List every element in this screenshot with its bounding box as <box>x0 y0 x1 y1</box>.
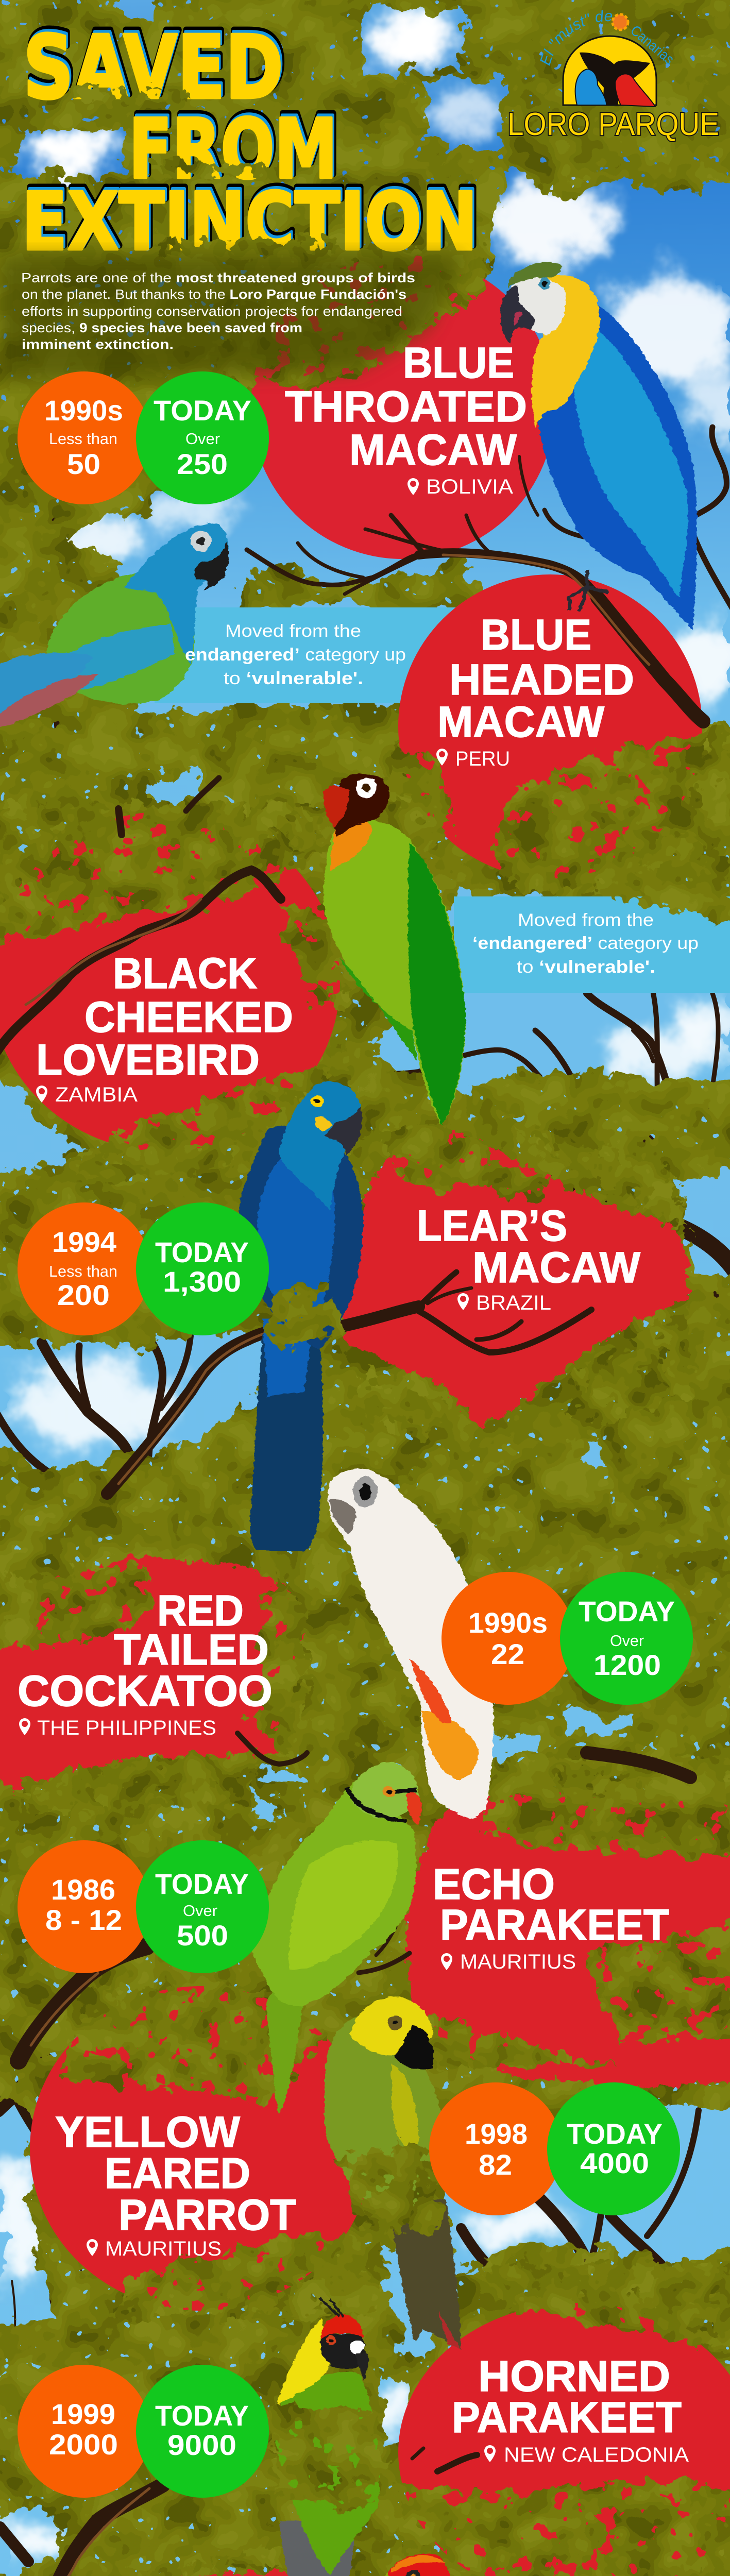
location: MAURITIUS <box>105 2238 222 2260</box>
name: PARAKEET <box>440 1901 669 1949</box>
branch: lower right of cockatoo <box>587 1753 690 1777</box>
stats <box>18 371 269 504</box>
branch: lear's macaw perch <box>107 1272 591 1494</box>
stats: 1994 <box>52 1226 116 1258</box>
red blob: blue throated macaw <box>251 255 555 559</box>
stats: 1990s <box>44 394 123 427</box>
branch: horned parakeet perch <box>0 2448 477 2576</box>
callout text: Moved from the <box>518 910 654 930</box>
logo: Loro Parque <box>507 10 719 142</box>
name: BLUE <box>403 338 514 387</box>
title word: EXTINCTION: EXTINCTION <box>22 175 478 268</box>
callout text: endangered’ category up <box>185 645 406 665</box>
bird: yellow eared parrot <box>325 1996 461 2349</box>
name: BLACK <box>113 949 257 997</box>
stats: 4000 <box>580 2147 649 2179</box>
title word: EXTINCTION: EXTINCTION <box>23 173 479 266</box>
stats: 50 <box>67 448 100 480</box>
stats: TODAY <box>579 1595 675 1628</box>
red blob: echo parakeet <box>405 1793 730 2087</box>
name <box>18 1586 273 1715</box>
bird: black cheeked lovebird <box>323 773 466 1126</box>
foliage: leaves over title <box>62 88 340 255</box>
title word: FROM: FROM <box>130 98 339 195</box>
species: blue headed macaw <box>185 611 634 770</box>
name: CHEEKED <box>84 993 293 1041</box>
red blob: black cheeked lovebird <box>0 811 340 1151</box>
branch: left lower <box>19 1927 410 2061</box>
title word: SAVED: SAVED <box>25 13 285 115</box>
stats: Over <box>610 1632 644 1650</box>
stats: 200 <box>57 1279 110 1311</box>
red blob: red tailed cockatoo <box>0 1555 302 1792</box>
logo arc text: El "must" de <box>540 10 612 66</box>
bird: horned parakeet <box>275 2298 379 2576</box>
name <box>437 611 634 746</box>
callouts: background panels <box>155 607 730 2576</box>
stats: TODAY <box>567 2117 663 2150</box>
title word: EXTINCTION: EXTINCTION <box>24 171 480 264</box>
red blob: red tailed amazon <box>60 2571 349 2576</box>
logo whale tail <box>580 53 650 105</box>
title word: SAVED: SAVED <box>25 14 285 116</box>
name: MACAW <box>437 698 605 746</box>
name: EARED <box>105 2149 250 2197</box>
name <box>433 1860 669 1949</box>
name: YELLOW <box>55 2108 241 2156</box>
stats: 500 <box>177 1919 228 1952</box>
callout text: ‘endangered’ category up <box>472 934 699 953</box>
intro text <box>21 270 415 352</box>
intro text: imminent extinction. <box>22 336 174 352</box>
callout text <box>472 910 699 977</box>
name: TAILED <box>114 1625 269 1674</box>
red blob: yellow eared parrot <box>30 1986 372 2311</box>
title word: FROM: FROM <box>131 97 339 193</box>
name <box>36 949 293 1084</box>
stats: 250 <box>177 448 228 480</box>
callout text: Moved from the <box>225 621 361 641</box>
bird: echo parakeet <box>252 1762 421 2115</box>
callout text: to ‘vulnerable'. <box>224 669 363 688</box>
stats: 1986 <box>51 1873 115 1906</box>
branch: cockatoo perch <box>237 1733 307 1764</box>
logo dolphin <box>575 69 606 105</box>
red blob: horned parakeet <box>398 2303 730 2576</box>
name <box>417 1201 641 1292</box>
intro text: Parrots are one of the most threatened groups of birds <box>21 270 415 285</box>
name: ECHO <box>433 1860 555 1908</box>
name: THROATED <box>285 382 527 431</box>
name <box>452 2352 682 2442</box>
species: red tailed cockatoo <box>18 1572 693 1739</box>
name: COCKATOO <box>18 1667 273 1715</box>
location: BRAZIL <box>476 1292 551 1314</box>
location: ZAMBIA <box>55 1083 138 1106</box>
title word: SAVED: SAVED <box>23 17 283 119</box>
species: blue throated macaw <box>18 338 527 504</box>
location: BOLIVIA <box>426 476 513 498</box>
stats: Less than <box>49 1262 117 1280</box>
stats: 1200 <box>593 1649 661 1681</box>
intro text: efforts in supporting conservation projects for endangered <box>22 303 402 319</box>
bird: red tailed amazon <box>347 2554 463 2576</box>
name: LEAR’S <box>417 1201 567 1250</box>
location: PERU <box>455 748 510 770</box>
stats: 82 <box>479 2148 512 2181</box>
name: RED <box>157 1586 244 1635</box>
stats: 1990s <box>468 1606 548 1639</box>
stats <box>429 2082 680 2215</box>
intro dark backdrop <box>0 255 464 381</box>
intro text: on the planet. But thanks to the Loro Parque Fundación's <box>22 286 406 302</box>
name: HORNED <box>478 2352 670 2400</box>
name: LOVEBIRD <box>36 1036 260 1084</box>
name: MACAW <box>472 1243 641 1292</box>
stats: 1999 <box>51 2398 115 2430</box>
stats: 2000 <box>49 2428 118 2461</box>
foliage: overlay on birds <box>268 1283 464 2576</box>
stats: Over <box>183 1902 217 1920</box>
stats <box>18 2365 269 2498</box>
logo arc text 2: Canarias <box>627 22 677 67</box>
name: HEADED <box>449 655 634 704</box>
stats: 9000 <box>167 2429 236 2461</box>
species: horned parakeet <box>18 2352 689 2498</box>
location: NEW CALEDONIA <box>504 2444 689 2466</box>
logo parrot <box>615 74 655 107</box>
stats: 22 <box>491 1638 524 1670</box>
name <box>285 338 527 474</box>
logo dome <box>563 36 656 105</box>
species: lear's macaw <box>18 1201 641 1335</box>
species: black cheeked lovebird <box>36 910 699 1106</box>
stats: 1998 <box>465 2117 528 2150</box>
species: yellow eared parrot <box>55 2082 680 2260</box>
name: MACAW <box>349 426 517 474</box>
species: echo parakeet <box>18 1840 669 1973</box>
callout text: to ‘vulnerable'. <box>517 957 655 977</box>
callout text <box>185 621 406 688</box>
location: THE PHILIPPINES <box>37 1717 216 1739</box>
stats: Over <box>185 430 220 448</box>
bird: lear's macaw <box>239 1081 363 1551</box>
title word: FROM: FROM <box>129 101 337 197</box>
title <box>22 13 480 268</box>
stats: TODAY <box>154 394 251 427</box>
stats: TODAY <box>155 1868 249 1900</box>
name: BLUE <box>481 611 591 659</box>
stats <box>18 1840 269 1973</box>
red blob: lear's macaw <box>345 1128 689 1427</box>
stats: Less than <box>49 430 117 448</box>
location: MAURITIUS <box>460 1951 576 1973</box>
stats <box>18 1202 269 1335</box>
stats: TODAY <box>155 1236 249 1268</box>
stats: TODAY <box>155 2399 249 2432</box>
stats: 1,300 <box>163 1265 241 1298</box>
red blob: blue headed macaw <box>398 574 702 878</box>
bird: red tailed cockatoo <box>328 1468 494 1818</box>
branch: black cheeked lovebird <box>0 778 281 1051</box>
stats <box>442 1572 693 1705</box>
name <box>55 2108 296 2239</box>
name: PARROT <box>118 2191 296 2239</box>
name: PARAKEET <box>452 2393 682 2442</box>
intro text: species, 9 species have been saved from <box>22 320 302 335</box>
bird: blue headed macaw <box>0 523 229 729</box>
bird: blue throated macaw <box>500 262 697 630</box>
stats: 8 - 12 <box>45 1904 122 1936</box>
branch: blue headed macaw perch <box>247 456 703 721</box>
logo flower <box>613 14 628 30</box>
